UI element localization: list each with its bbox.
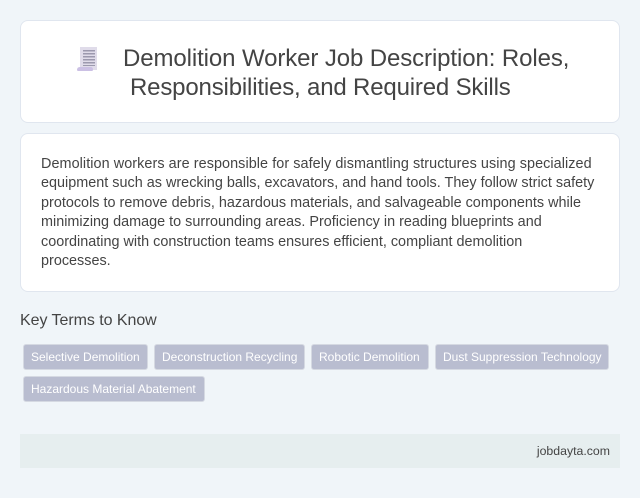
text block: description: minimizing damage to surrounding areas. Proficiency in reading blueprints and [41,214,542,230]
tag: dust suppression technology: Dust Suppression Technology [443,350,602,364]
text block: description: equipment such as wrecking balls, excavators, and hand tools. They follow strict safety [41,175,594,191]
tag: hazardous material abatement [23,376,205,402]
title: Responsibilities, and Required Skills [130,74,511,101]
icon: document scroll [77,47,97,71]
tag: robotic demolition: Robotic Demolition [319,350,420,364]
tag: selective demolition [23,344,148,370]
tag: robotic demolition [311,344,429,370]
text block: description: processes. [41,253,111,269]
tag: deconstruction recycling [154,344,305,370]
tag: deconstruction recycling: Deconstruction Recycling [162,350,297,364]
tag: dust suppression technology [435,344,609,370]
text block: description: coordinating with construction teams ensures efficient, compliant demolition [41,234,522,250]
panel: title card [20,20,620,123]
title: Demolition Worker Job Description: Roles, [123,45,569,72]
footer: source: jobdayta.com [537,444,610,458]
panel: description card [20,133,620,292]
tag: selective demolition: Selective Demolition [31,350,140,364]
tag: hazardous material abatement: Hazardous Material Abatement [31,382,196,396]
text block: description [41,156,594,269]
text block: description: protocols to remove debris, hazardous materials, and salvageable components while [41,195,581,211]
title [123,45,569,101]
heading: key terms: Key Terms to Know [20,312,157,329]
footer bar [20,434,620,468]
text block: description: Demolition workers are responsible for safely dismantling structures using specialized [41,156,592,172]
